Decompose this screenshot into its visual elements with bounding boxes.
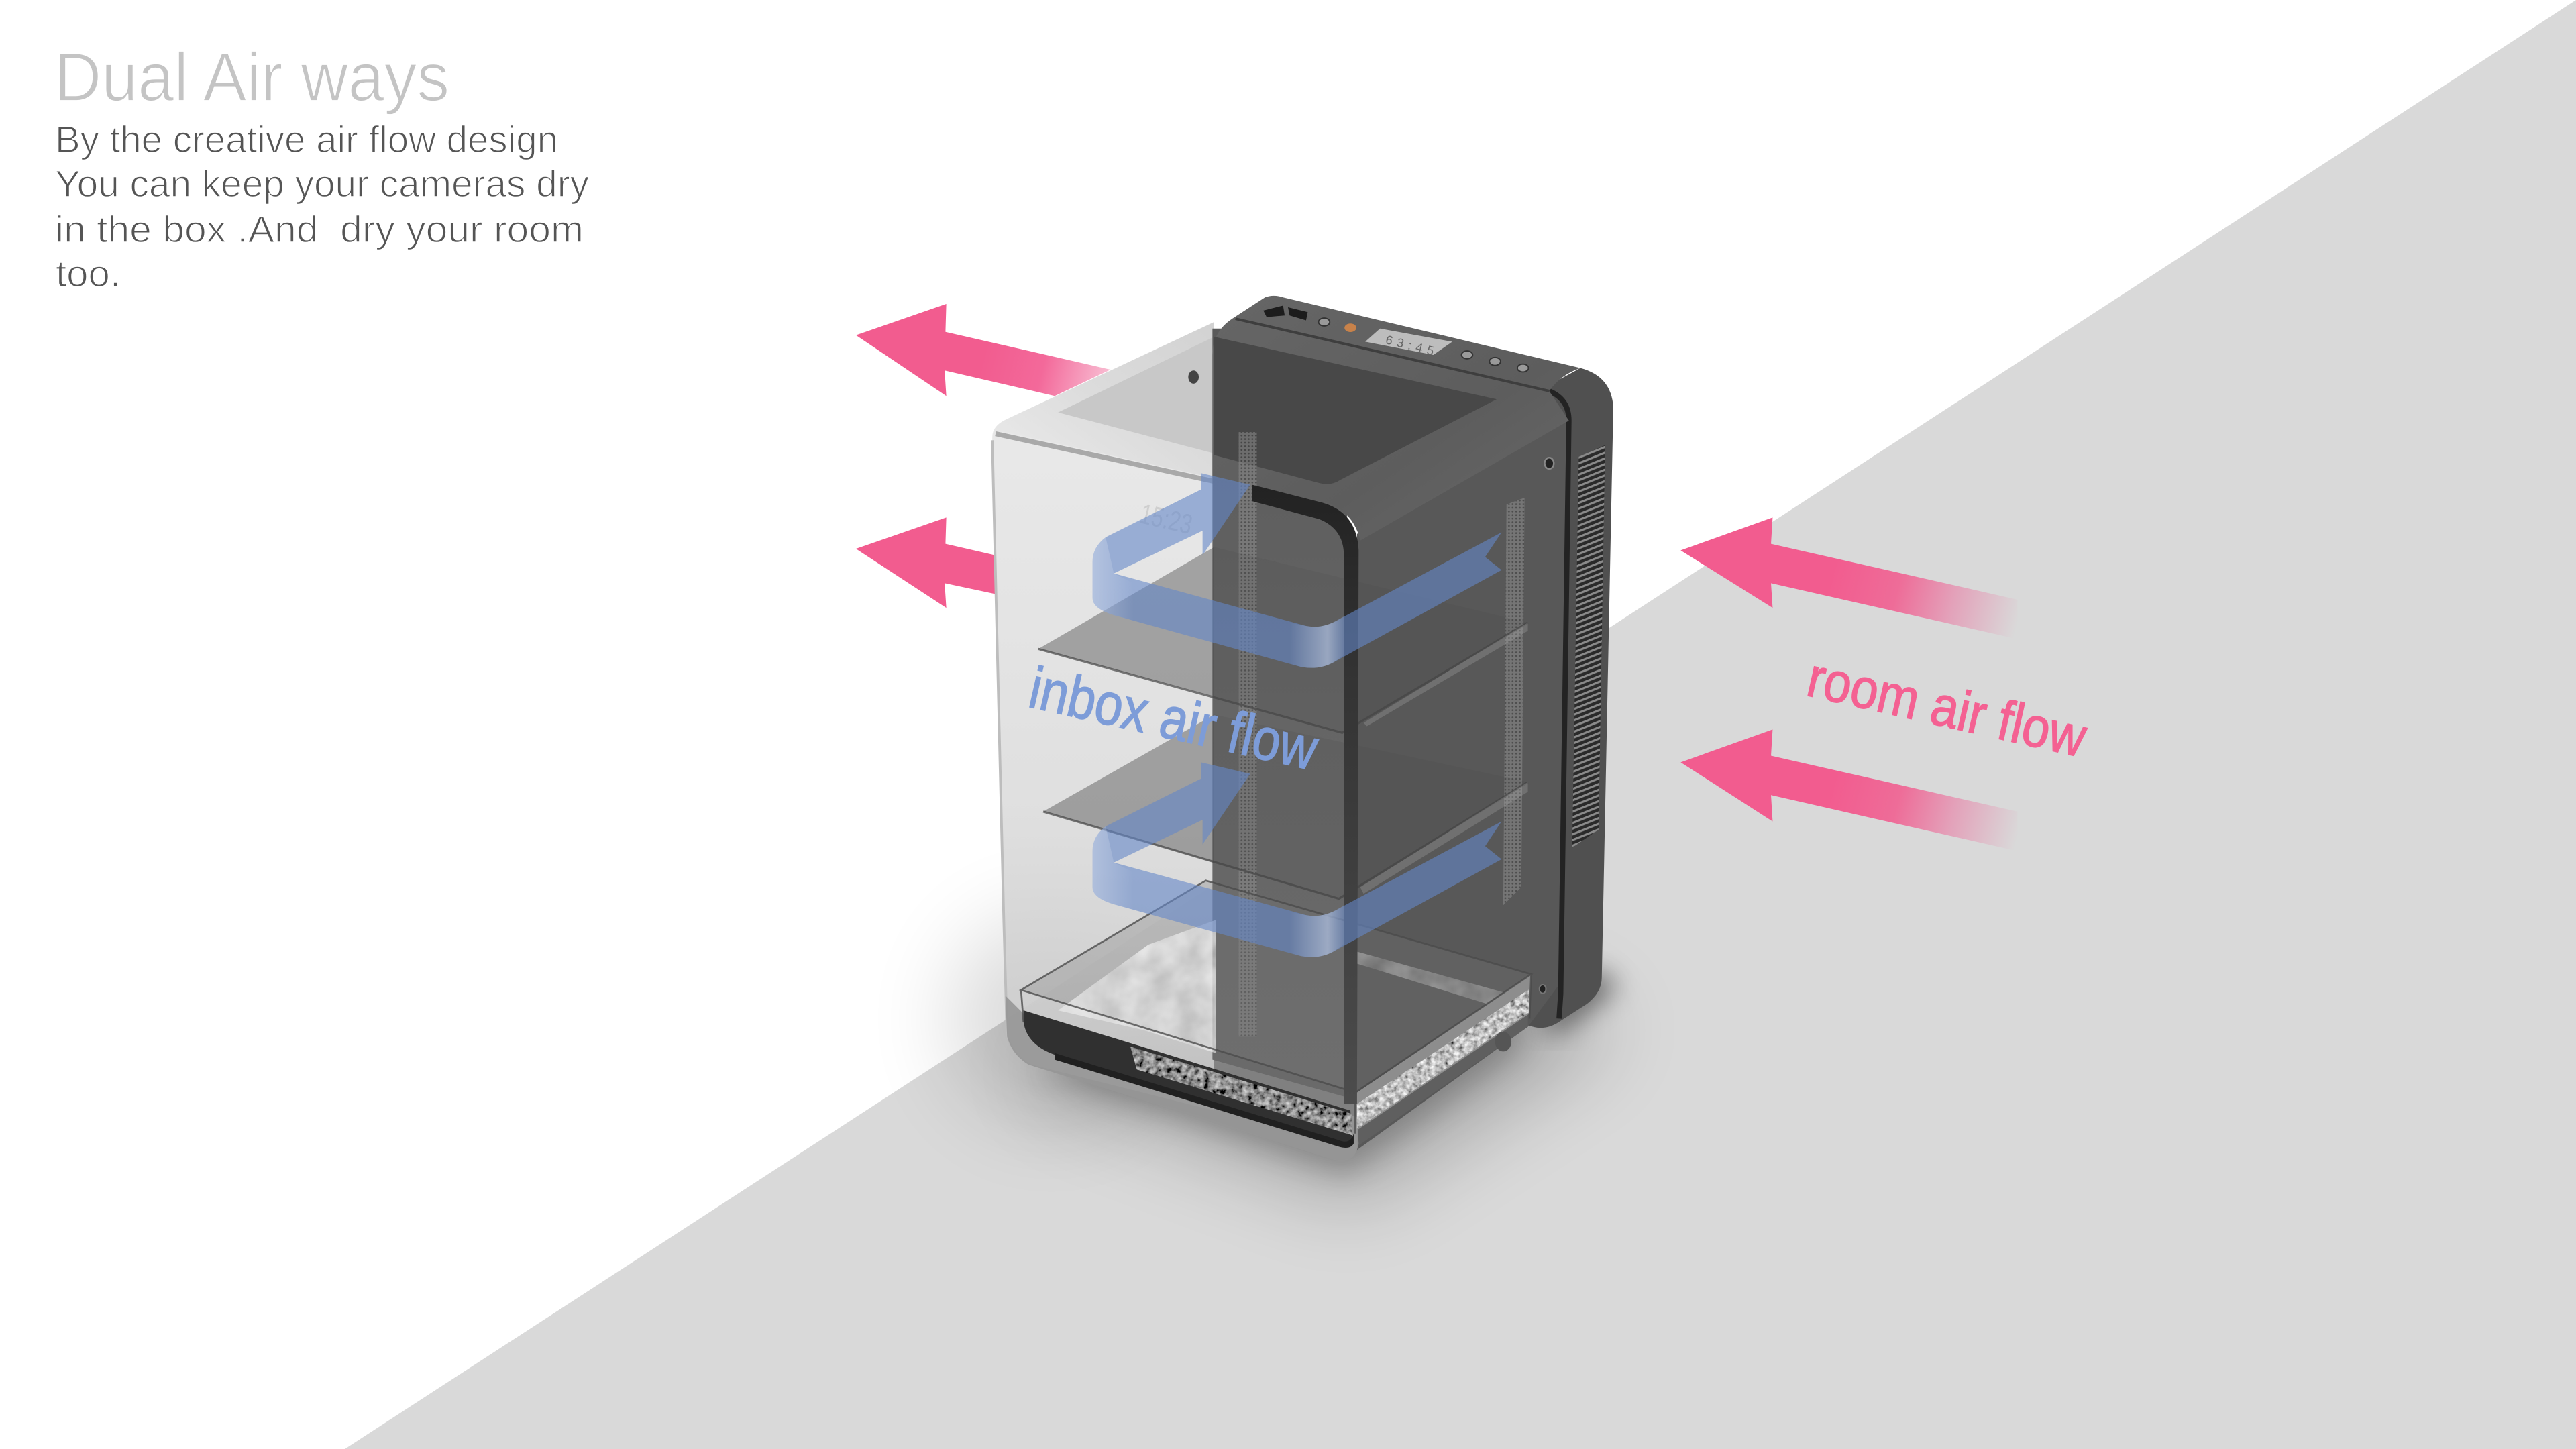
device illustration with air flows [856, 296, 2017, 1199]
lower side knob [1540, 985, 1546, 994]
control strip groove [1236, 319, 1549, 391]
tray right face [1357, 974, 1531, 1130]
title: Dual Air ways [54, 39, 449, 115]
top face [1212, 296, 1580, 541]
side knob [1545, 458, 1554, 469]
desiccant tray [1006, 881, 1531, 1161]
seam [1549, 391, 1569, 1018]
buttons [1319, 318, 1529, 372]
arrow: upper exhaust air [856, 304, 1111, 396]
glass base rim [1006, 996, 1358, 1161]
LCD display [1365, 329, 1452, 355]
front frame bar [1252, 484, 1358, 1104]
description text: You can keep your cameras dry [55, 162, 589, 205]
crystal band rear right [1344, 948, 1503, 1004]
lower ribbon arrow: inbox air flow [1093, 762, 1501, 957]
label: room air flow: room air flow [1802, 645, 2092, 769]
black tray base band [1055, 1053, 1354, 1148]
mesh strip rear [1239, 432, 1256, 1036]
dark rear body [1212, 296, 1613, 1150]
tray dark layer [1024, 1010, 1352, 1144]
top recess [1214, 337, 1497, 484]
side panel with vent [1528, 368, 1613, 1028]
floor shadow [1027, 953, 1618, 1199]
description text [55, 118, 589, 294]
orange power button [1344, 323, 1356, 332]
description text: in the box .And dry your room [55, 208, 584, 250]
rear wall seen through glass [1212, 329, 1347, 1097]
glass left edge [992, 440, 1007, 1036]
upper ribbon arrow: inbox air flow [1093, 473, 1501, 668]
description text: too. [56, 252, 121, 294]
shelf lower [1043, 714, 1528, 899]
description text: By the creative air flow design [55, 118, 558, 160]
soft shadow on wall [950, 917, 1153, 1120]
rock texture front [1130, 1046, 1352, 1135]
glass front panel [992, 431, 1214, 1111]
mesh strip side [1503, 498, 1525, 905]
reflected clock: 15:23 [1137, 498, 1195, 540]
shelf upper [1038, 547, 1528, 733]
arrow: upper room air intake [1680, 517, 2017, 639]
body foot [1495, 1032, 1511, 1051]
glass top frame [992, 322, 1214, 478]
tray top surface [1021, 881, 1531, 1093]
rock texture right [1357, 989, 1529, 1128]
front frame upper edge on glass [996, 434, 1214, 482]
LCD text: 63:45 [1385, 332, 1436, 358]
pale crystals left [1058, 920, 1216, 1053]
base under tray right [1357, 1014, 1528, 1146]
tray outline [1021, 881, 1531, 1134]
arrow: lower exhaust air [856, 517, 996, 608]
right side wall [1357, 414, 1569, 1150]
usb ports [1263, 306, 1307, 321]
arrow: lower room air intake [1680, 729, 2017, 851]
vent slots [1572, 445, 1605, 848]
glass top recess [1058, 337, 1214, 453]
label: inbox air flow: inbox air flow [1024, 654, 1324, 783]
glass knob [1188, 370, 1199, 384]
